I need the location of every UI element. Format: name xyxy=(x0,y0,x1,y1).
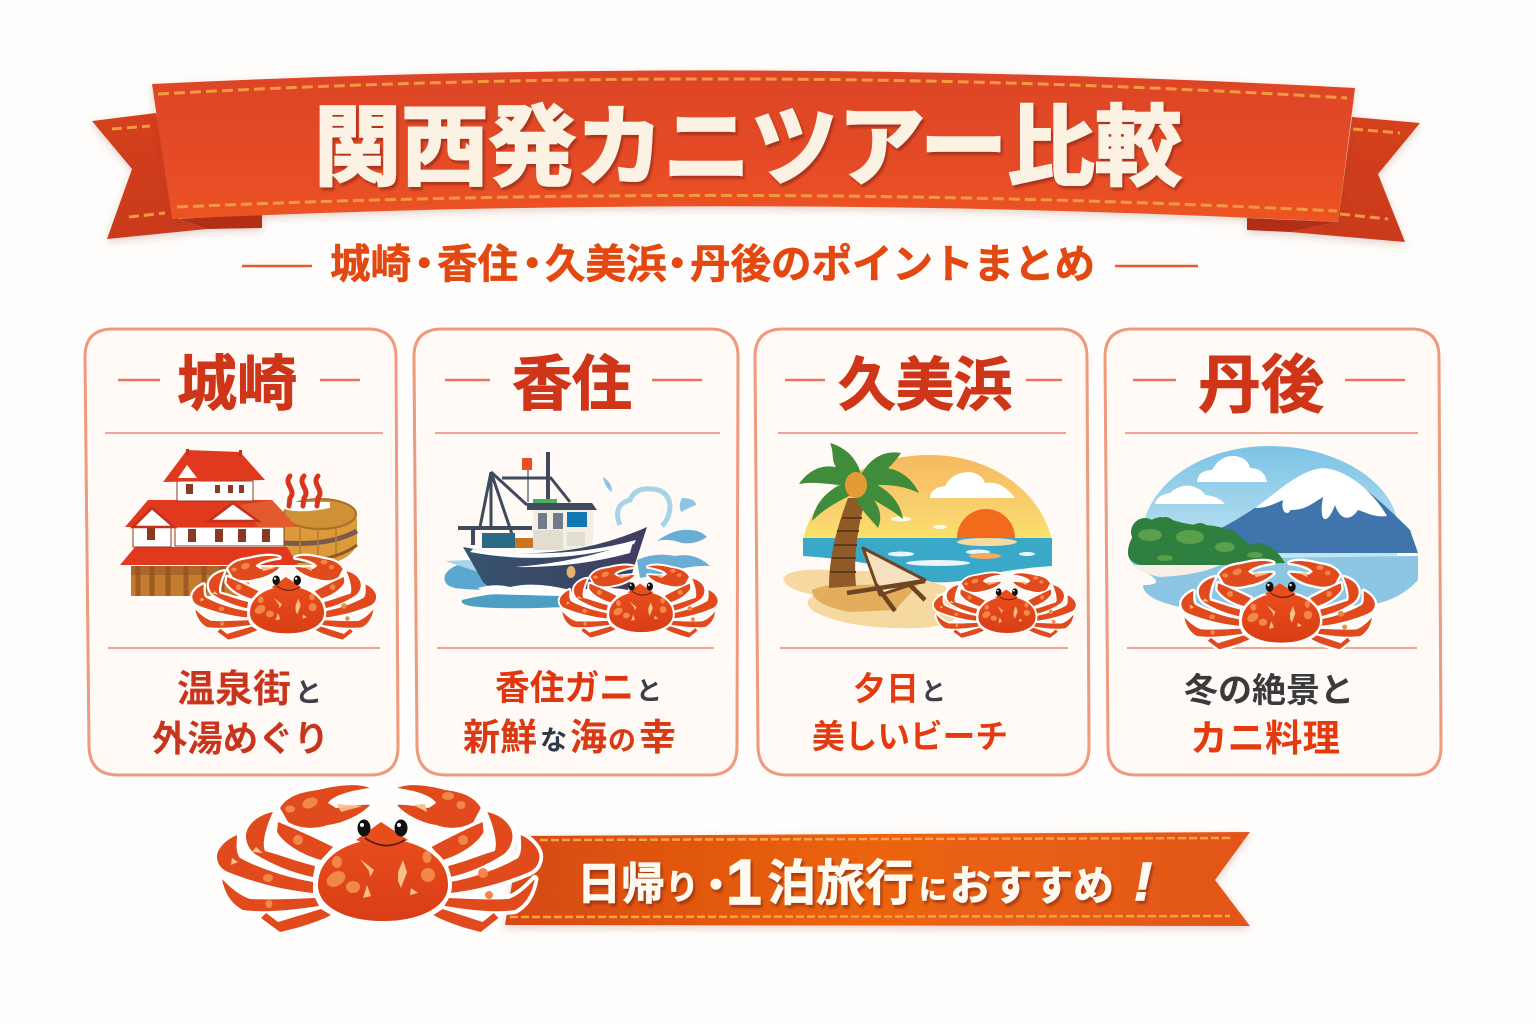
subtitle xyxy=(242,241,1198,287)
callout text: 日帰 xyxy=(577,860,665,909)
caption: 丹後 xyxy=(1184,672,1354,759)
callout text: 1 xyxy=(726,846,762,918)
left ribbon tail xyxy=(92,113,262,239)
right ribbon tail xyxy=(1247,117,1420,242)
subtitle: ・ xyxy=(512,241,552,287)
caption: 香住 xyxy=(463,669,676,758)
callout text: ! xyxy=(1134,852,1152,912)
subtitle: 丹後のポイントまとめ xyxy=(690,241,1095,287)
icon: snowy mountain and bay xyxy=(1128,446,1418,610)
caption: 香住: な xyxy=(540,726,567,756)
panel: 丹後 xyxy=(1105,329,1441,775)
caption: 香住: 幸 xyxy=(639,717,676,758)
callout text xyxy=(577,846,1152,918)
caption: 香住: 新鮮 xyxy=(463,717,537,758)
caption: 久美浜: 美しいビーチ xyxy=(812,718,1008,755)
caption: 丹後: カニ料理 xyxy=(1190,718,1340,759)
caption: 香住: と xyxy=(636,676,662,706)
icon: beach sunset with palm xyxy=(783,443,1052,628)
heading: 香住: 香住 xyxy=(512,351,632,418)
caption: 城崎 xyxy=(152,669,329,759)
heading: 丹後: 丹後 xyxy=(1198,351,1324,421)
caption: 丹後: 冬の絶景と xyxy=(1184,672,1354,710)
subtitle: ・ xyxy=(657,241,698,287)
bottom callout ribbon xyxy=(505,832,1250,926)
panel: 香住 xyxy=(414,329,738,775)
subtitle: 香住 xyxy=(437,241,518,287)
caption: 城崎: 外湯めぐり xyxy=(152,718,329,759)
caption: 香住: 香住ガニ xyxy=(495,669,634,708)
callout text: ・ xyxy=(696,864,736,908)
icon: crab xyxy=(1181,561,1375,649)
heading: 城崎: 城崎 xyxy=(177,351,297,418)
caption: 城崎: 温泉街と xyxy=(177,669,322,711)
caption: 香住: の xyxy=(608,725,636,756)
caption: 久美浜: と xyxy=(921,678,946,706)
icon: crab xyxy=(560,566,718,637)
callout text: おすすめ xyxy=(950,863,1114,909)
panel: 城崎 xyxy=(85,329,398,775)
icon: crab xyxy=(192,556,376,640)
icon: large crab mascot xyxy=(217,785,539,932)
icon: castle and hot spring barrel xyxy=(120,449,357,596)
caption: 久美浜 xyxy=(812,670,1008,755)
caption: 久美浜: 夕日 xyxy=(853,670,919,707)
caption: 香住: 海 xyxy=(570,717,607,758)
heading: 久美浜: 久美浜 xyxy=(838,353,1012,418)
icon: fishing boat xyxy=(444,452,710,608)
callout text: に xyxy=(919,874,947,905)
panel: 久美浜 xyxy=(755,329,1089,775)
subtitle: ・ xyxy=(404,241,444,287)
subtitle: 久美浜 xyxy=(545,241,666,287)
banner body xyxy=(152,70,1355,222)
title: 関西発カニツアー比較 xyxy=(314,98,1182,197)
callout text: り xyxy=(665,869,699,907)
icon: crab xyxy=(934,573,1076,638)
subtitle: 城崎 xyxy=(330,241,411,287)
title banner xyxy=(92,70,1420,242)
callout text: 泊旅行 xyxy=(767,857,914,911)
